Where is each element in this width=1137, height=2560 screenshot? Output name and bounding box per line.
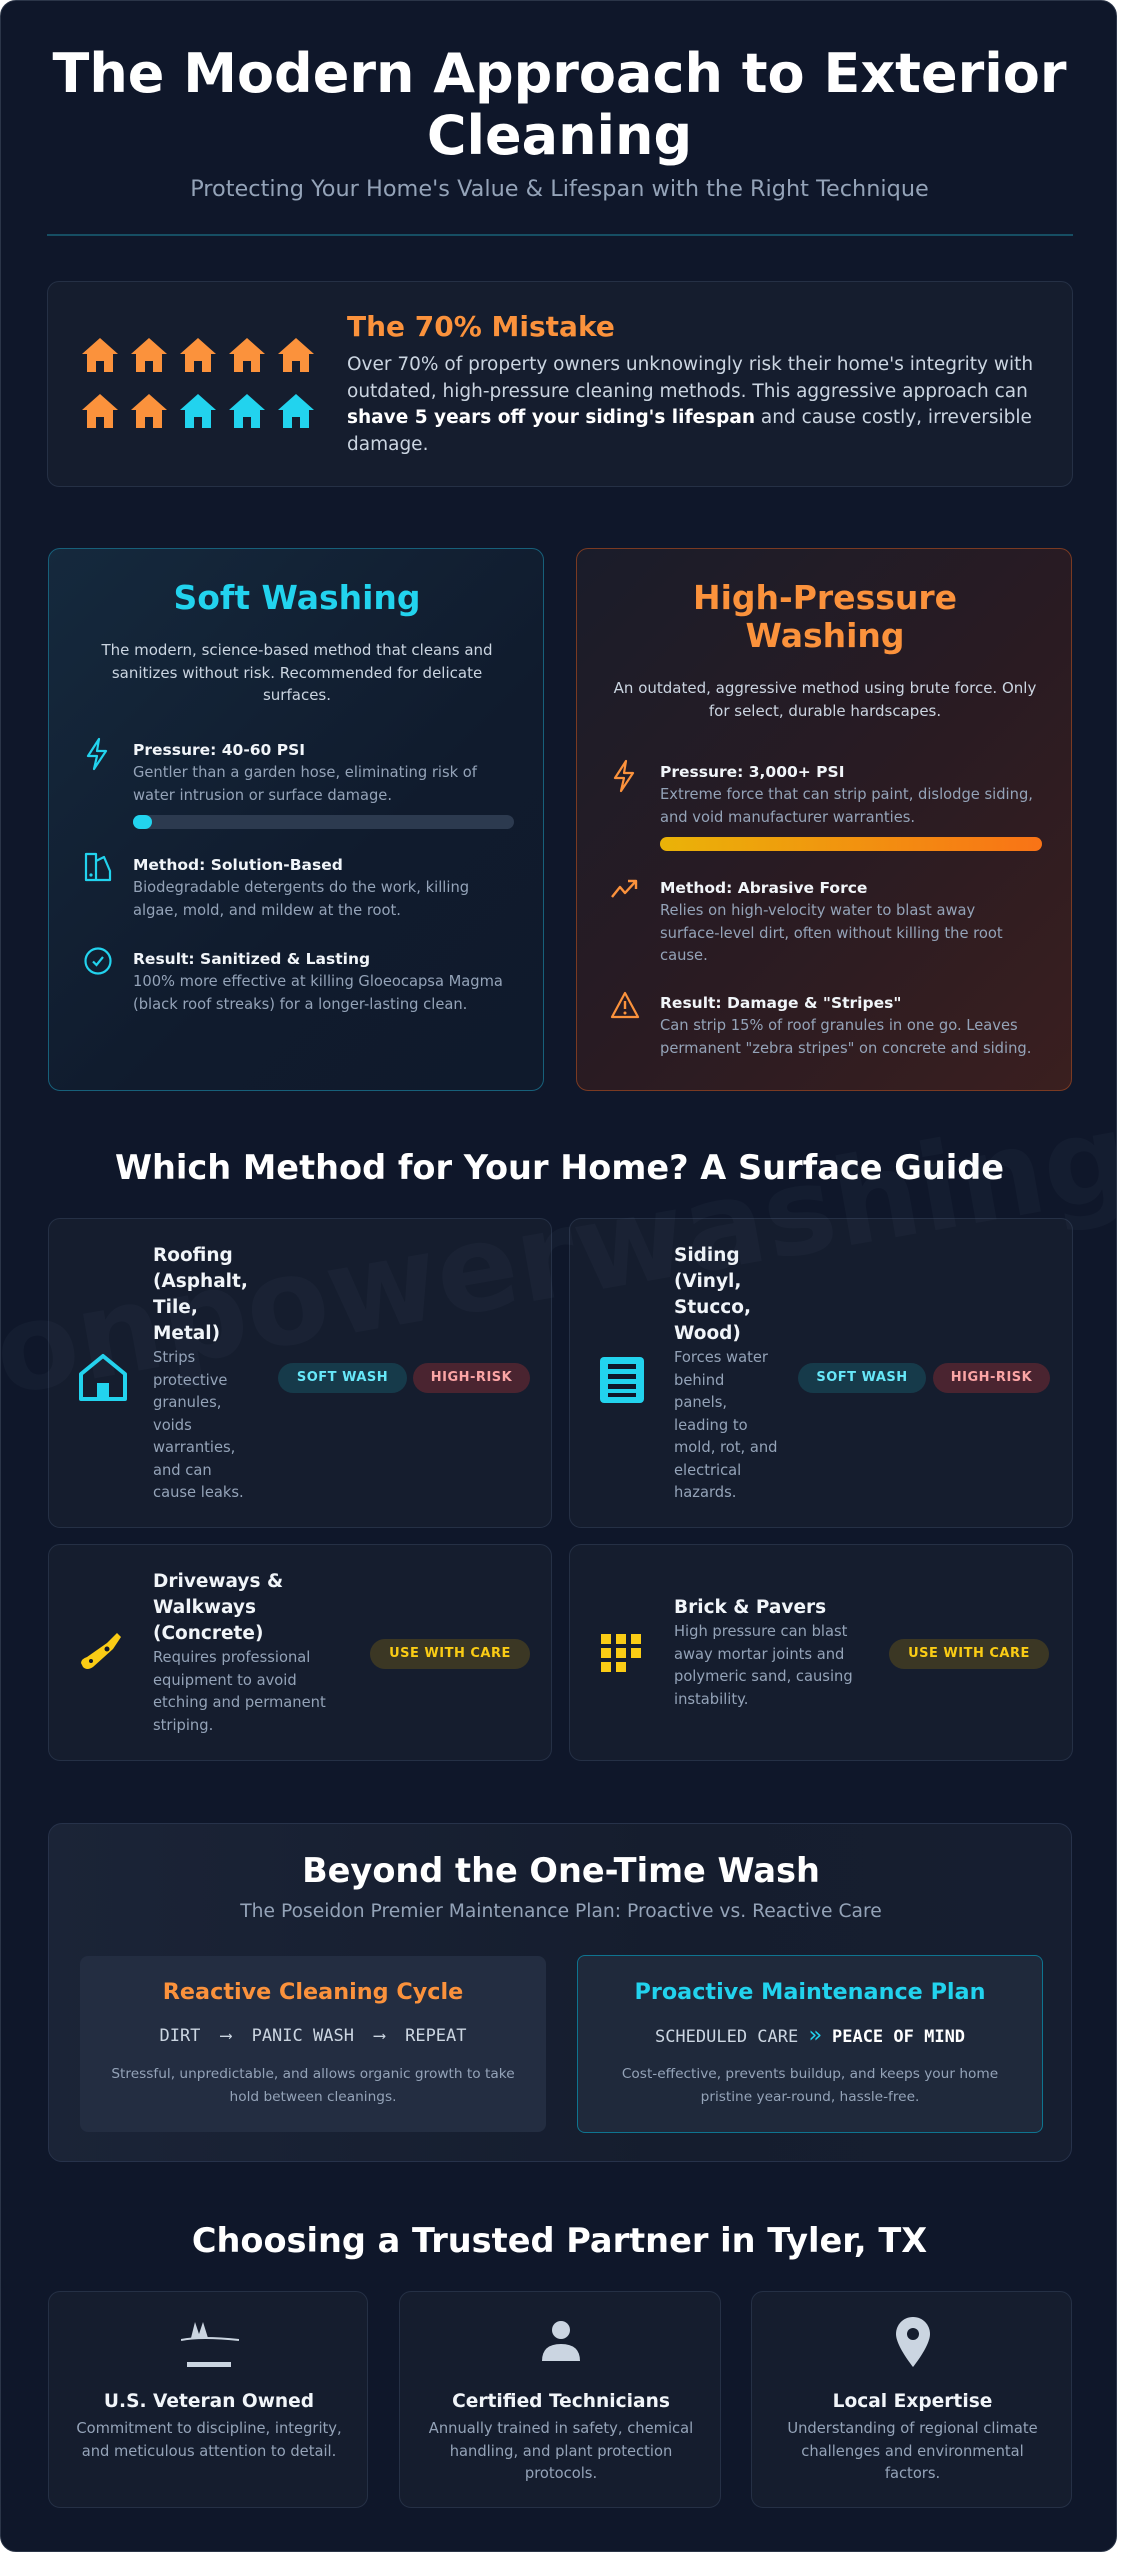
title: Cleaning (427, 104, 692, 167)
panel: veteran owned: Commitment to discipline, integrity, and meticulous attention to detail. (76, 2420, 342, 2460)
text: driveways: Requires professional equipment to avoid etching and permanent striping. (153, 1649, 326, 1734)
panel: veteran owned (48, 2291, 368, 2508)
text: siding: Forces water behind panels, leading to mold, rot, and electrical hazards. (674, 1349, 777, 1501)
panel: soft washing (48, 548, 544, 1091)
panel: veteran owned: U.S. Veteran Owned (104, 2391, 314, 2412)
flow: dirt cycle: DIRT ⟶ PANIC WASH ⟶ REPEAT (159, 2026, 467, 2046)
item: pressure: Pressure: 3,000+ PSI (660, 763, 844, 781)
title (52, 42, 1066, 167)
item: pressure: Pressure: 40-60 PSI (133, 741, 305, 759)
item: result: Result: Damage & "Stripes" (660, 994, 901, 1012)
item: pressure: Gentler than a garden hose, eliminating risk of water intrusion or surface damage. (133, 764, 477, 804)
title: The Modern Approach to Exterior (53, 42, 1066, 105)
item: method: Relies on high-velocity water to blast away surface-level dirt, often without killing the root cause. (660, 902, 1003, 964)
icon: location pin (896, 2317, 930, 2367)
text: brick: Brick & Pavers (674, 1597, 826, 1618)
panel: certified technicians (399, 2291, 721, 2508)
item: result: 100% more effective at killing Gloeocapsa Magma (black roof streaks) for a longer-lasting clean. (133, 973, 503, 1012)
text: roofing: Strips protective granules, voids warranties, and can cause leaks. (153, 1349, 244, 1501)
item: method: Method: Abrasive Force (660, 879, 867, 897)
text: roofing (153, 1245, 248, 1501)
heading: surface guide: Which Method for Your Home? A Surface Guide (115, 1148, 1004, 1187)
subtitle: The Poseidon Premier Maintenance Plan: Proactive vs. Reactive Care (240, 1901, 882, 1922)
heading: Soft Washing (173, 578, 421, 617)
panel: siding: HIGH-RISK (951, 1370, 1032, 1385)
item: pressure (660, 763, 1033, 826)
item: method: Method: Solution-Based (133, 856, 343, 874)
subtitle: Protecting Your Home's Value & Lifespan with the Right Technique (190, 176, 929, 202)
icon: siding (600, 1357, 644, 1403)
bar: pressure (660, 837, 1042, 851)
item: result: Can strip 15% of roof granules in one go. Leaves permanent "zebra stripes" on concrete and siding. (660, 1017, 1031, 1056)
flow: scheduled care: SCHEDULED CARE » PEACE OF MIND (655, 2023, 965, 2048)
box: proactive (577, 1955, 1043, 2133)
icon: veteran (181, 2322, 239, 2367)
panel: roofing: HIGH-RISK (431, 1370, 512, 1385)
text block: The modern, science-based method that cleans and sanitizes without risk. Recommended for delicate surfaces. (101, 641, 493, 704)
tag: USE WITH CARE (389, 1646, 511, 1661)
box: reactive (80, 1956, 546, 2132)
tags: SOFT WASH (297, 1370, 388, 1385)
bar: pressure (133, 815, 514, 829)
icon: house pictogram (82, 338, 314, 428)
box: reactive: Stressful, unpredictable, and allows organic growth to take hold between cleanings. (111, 2066, 515, 2104)
item: result: Result: Sanitized & Lasting (133, 950, 370, 968)
icon: person (542, 2321, 580, 2361)
icon: solution (84, 852, 112, 882)
item: result (660, 994, 1031, 1056)
panel: certified technicians: Certified Technicians (452, 2391, 670, 2412)
icon: trend (611, 880, 638, 898)
heading: Beyond the One-Time Wash (302, 1851, 820, 1890)
panel: siding (569, 1218, 1073, 1528)
box: proactive: Proactive Maintenance Plan (634, 1979, 985, 2005)
panel: roofing (48, 1218, 552, 1528)
item: result (133, 950, 503, 1012)
text: driveways: Driveways & Walkways (Concrete) (153, 1571, 283, 1644)
panel: local expertise: Local Expertise (833, 2391, 992, 2412)
icon: warning (610, 992, 640, 1018)
item: pressure (133, 741, 478, 804)
panel: high-pressure washing (576, 548, 1072, 1091)
panel: brick (569, 1544, 1073, 1761)
panel: maintenance plan (48, 1823, 1072, 2162)
box: reactive: Reactive Cleaning Cycle (163, 1979, 463, 2005)
icon: bricks (601, 1634, 641, 1672)
tag: USE WITH CARE (908, 1646, 1030, 1661)
tags (278, 1363, 407, 1393)
icon: spray wand (81, 1633, 121, 1669)
icon: check (84, 947, 112, 975)
text block: Over 70% of property owners unknowingly risk their home's integrity with outdated, high-pressure cleaning methods. This aggressive approach can shave 5 years off your siding's lifespan and cause costly, irreversible damage. (347, 354, 1033, 454)
tag (889, 1639, 1049, 1669)
tags: SOFT WASH (816, 1370, 908, 1385)
item: pressure: Extreme force that can strip paint, dislodge siding, and void manufacturer warranties. (660, 786, 1033, 826)
panel: 70% mistake (47, 281, 1073, 487)
text: brick: High pressure can blast away mortar joints and polymeric sand, causing instability. (674, 1623, 853, 1708)
text: siding (674, 1245, 777, 1501)
text: siding: Siding (Vinyl, Stucco, Wood) (674, 1245, 751, 1344)
text block: An outdated, aggressive method using brute force. Only for select, durable hardscapes. (614, 679, 1036, 720)
panel: certified technicians: Annually trained in safety, chemical handling, and plant protection protocols. (429, 2420, 693, 2482)
text: driveways (153, 1571, 326, 1734)
text: roofing: Roofing (Asphalt, Tile, Metal) (153, 1245, 248, 1344)
tags (798, 1363, 926, 1393)
heading: Washing (745, 616, 905, 655)
item: method (133, 856, 469, 918)
panel: local expertise (751, 2291, 1072, 2508)
heading: trusted partner: Choosing a Trusted Partner in Tyler, TX (192, 2221, 927, 2260)
icon: house (79, 1354, 127, 1401)
item: method: Biodegradable detergents do the work, killing algae, mold, and mildew at the root. (133, 879, 469, 918)
panel: driveways (48, 1544, 552, 1761)
panel: local expertise: Understanding of regional climate challenges and environmental factors. (787, 2420, 1038, 2482)
heading: High-Pressure (693, 578, 957, 617)
tag (370, 1639, 530, 1669)
icon: bolt (86, 738, 108, 770)
heading: 70% mistake: The 70% Mistake (347, 310, 615, 343)
icon: bolt (614, 760, 634, 792)
heading (693, 578, 957, 655)
box: proactive: Cost-effective, prevents buildup, and keeps your home pristine year-round, hassle-free. (622, 2066, 998, 2104)
